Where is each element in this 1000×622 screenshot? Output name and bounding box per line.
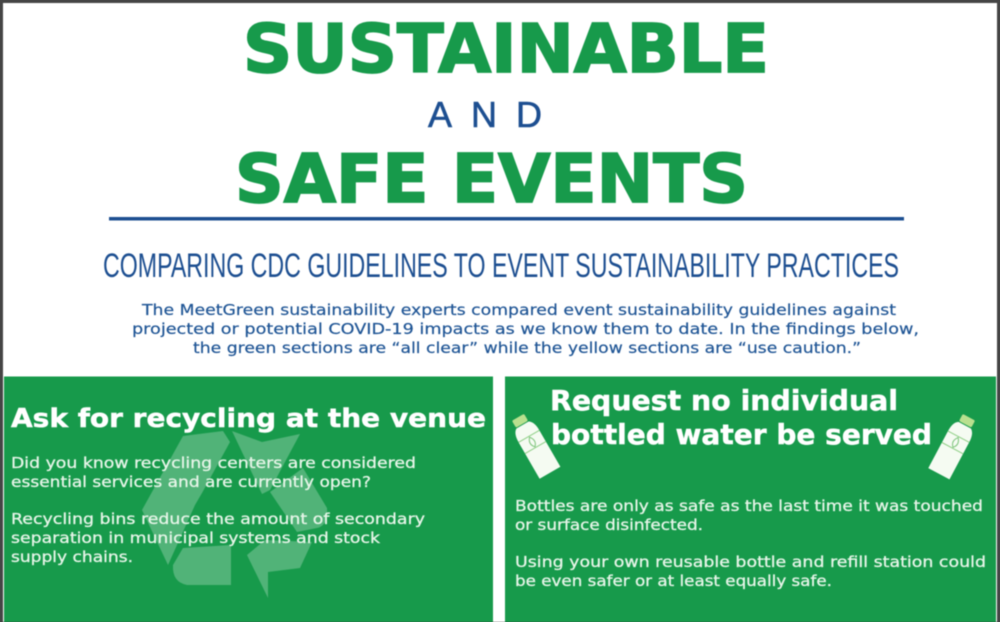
icon: left bottle [508,411,560,479]
panel: bottled water [505,376,996,622]
title: SUSTAINABLE [243,10,769,88]
panel heading [550,384,932,451]
title: SAFE EVENTS [235,140,748,218]
panel text: supply chains. [11,548,133,566]
intro paragraph: The MeetGreen sustainability experts compared event sustainability guidelines against [141,301,896,319]
panel heading: Request no individual [550,384,898,417]
panel text [11,454,425,566]
panel text: Recycling bins reduce the amount of secondary [11,510,425,528]
panel text [515,497,986,590]
panel text: or surface disinfected. [515,516,703,534]
title: AND [428,94,542,135]
panel heading: Ask for recycling at the venue [11,404,486,434]
panel text: essential services and are currently open? [11,473,371,491]
title [235,10,769,218]
intro paragraph [132,301,919,357]
panel text: be even safer or at least equally safe. [515,572,832,590]
panel text: Did you know recycling centers are considered [11,454,416,472]
panel text: separation in municipal systems and stock [11,529,380,547]
intro paragraph: projected or potential COVID-19 impacts as we know them to date. In the findings below, [132,320,919,338]
panel text: Using your own reusable bottle and refill station could [515,553,986,571]
panel: recycling [4,376,493,622]
title rule [109,217,904,220]
panel text: Bottles are only as safe as the last time it was touched [515,497,983,515]
icon: right bottle [928,412,980,479]
panel heading: bottled water be served [551,418,932,451]
intro paragraph: the green sections are “all clear” while the yellow sections are “use caution.” [193,339,861,357]
icon: recycling symbol [142,431,327,598]
